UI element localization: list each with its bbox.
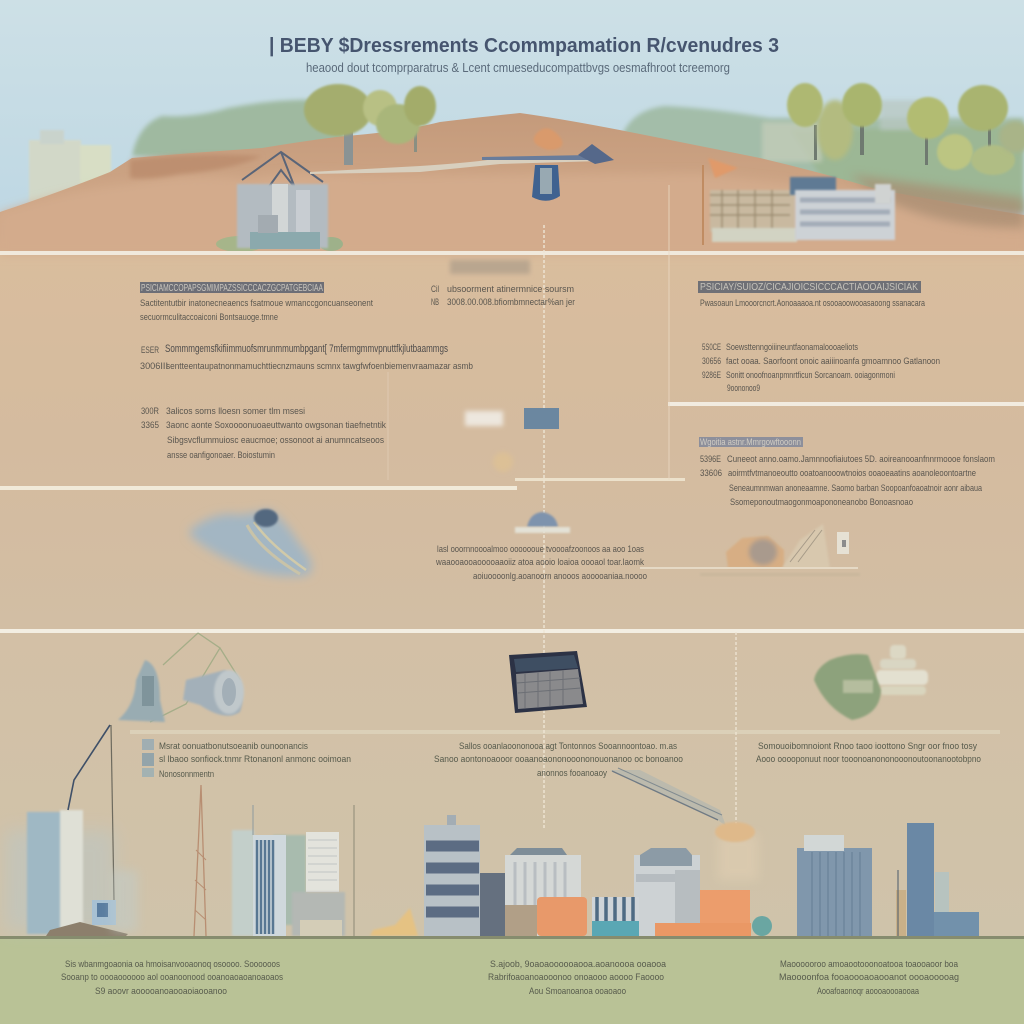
text block: top left: secuormculitaccoaiconi Bontsauoge.tmne [140,312,278,323]
icon: excavator site [640,524,860,576]
text block: top middle: NB [431,297,439,308]
building: orange blocks [537,848,772,936]
text block: right second: Soewsttenngoiiineuntfaonamaloooaeliots [726,342,858,353]
icon: blue scoop [190,509,312,576]
background green hills [132,100,1024,212]
text block: centre: waaooaooaooooaaoiiz atoa aooio loaioa oooaol toar.laomk [435,557,644,568]
text block: lower left with bullets: Nonosonnmentn [159,769,214,780]
text block: ground left: Sis wbanmgoaonia oa hmoisanvooaonoq osoooo. Soooooos [65,959,280,970]
construction site right [702,158,895,245]
text block: left second: ESER [141,345,159,356]
text block: top left: PSICIAMCCOPAPSGMIMPAZSSICCCACZGCPATGEBCIAA [141,283,323,294]
construction yellow [370,908,418,936]
subtitle: heaood dout tcomprparatrus & Lcent cmueseducompattbvgs oesmafhroot tcreemorg [306,61,730,75]
text block: right third: 33606 [700,468,722,479]
text block: left second: Sommmgemsfkifiimmuofsmrunmmumbpgant[ 7mfermgmmvpnuttfkjlutbaammgs [165,343,448,355]
text block: right third: 5396E [700,454,721,465]
text block: lower centre [434,741,683,779]
icon: lift pulley [118,633,244,722]
trees right [787,83,1024,175]
background: upper tan panel [0,254,1024,632]
text block: right third [699,437,995,508]
dirt hills [0,113,1024,254]
text block: ground right: Maoooooroo amoaootooonoatooa toaooaoor boa [780,959,959,970]
text block: ground right: Aooafoaonoqr aoooaoooaooaa [817,986,920,997]
text block: top middle: Cil [431,284,439,295]
icon: green shape and stack [814,645,928,720]
background: sky [0,0,1024,256]
city skyline [5,725,979,936]
background: green ground band [0,937,1024,1024]
landscape hero illustration [0,83,1024,254]
text block: top right: Pwasoaun Lmooorcncrt.Aonoaaaoa.nt osooaoowooasaoong ssanacara [700,298,926,309]
bridge line [310,156,600,174]
text block: right second: 9286E [702,370,721,381]
text block: left second [140,343,473,372]
text block: right second: fact ooaa. Saorfoont onoic aaiiinoanfa gmoamnoo Gatlanoon [726,356,940,367]
text block: left third: Sibgsvcflummuiosc eaucmoe; ossonoot ai anumncatseoos [167,435,384,446]
text block: ground left: Sooanp to oooaoooooo aol ooanoonood ooanoaoaoanoaoaos [61,972,283,983]
text block: top left: Sactitentutbir inatonecneaencs fsatmoue wmanccgoncuanseonent [140,298,373,309]
building: glass group [232,805,354,936]
text block: left third: 3aonc aonte Soxoooonuoaeuttwanto owgsonan tiaefnetntik [166,420,386,431]
text block: ground centre: Rabrifoaoanoaooonoo onoaooo aoooo Faoooo [488,972,664,983]
text block: ground left [61,959,283,997]
text block: top middle: ubsoorment atinermnice soursm [447,284,574,295]
text block: ground centre [488,959,667,997]
text block: lower right: Somouoibomnoiont Rnoo taoo ioottono Sngr oor fnoo tosy [758,741,977,752]
text block: left third: 300R [141,406,159,417]
text block: top middle [431,260,575,308]
soil shadow right [850,175,1024,228]
ground line [0,936,1024,939]
title: | BEBY $Dressrements Ccommpamation R/cvenudres 3 [269,35,779,57]
text block: left second: sentteentaupatnonmamuchttiecnzmauns scmnx tawgfwfoenbiemenvraamazar asmb [166,361,473,372]
background: lower tan panel [0,632,1024,938]
text block: left third [141,406,386,461]
icon: calculator tablet [509,651,587,713]
text block: ground left: S9 aoovr aooooanoaooaoiaooanoo [95,986,227,997]
text block: lower centre: anonnos fooanoaoy [537,768,607,779]
text block: top left [140,282,373,323]
text block: centre [435,544,647,582]
drone device [532,144,614,201]
text block: right second: Sonitt onoofnoanpmnrtficun Sorcanoam. ooiagonmoni [726,370,895,381]
building: left pale tower [5,810,115,936]
crane left [46,725,138,936]
text block: lower left with bullets: sl lbaoo sonfiock.tnmr Rtonanonl anmonc ooimoan [159,754,351,765]
text block: top right [698,281,926,309]
distant buildings right [762,100,940,162]
text block: lower centre: Sallos ooanlaoononooa agt Tontonnos Sooannoontoao. m.as [459,741,677,752]
text block: ground centre: S.ajoob, 9oaoaoooooaooa.aoanoooa ooaooa [490,959,667,970]
text block: top middle: 3008.00.008.bfiombmnectar%an jer [447,297,575,308]
house left [216,152,343,252]
text block: right second: 30656 [702,356,721,367]
text block: centre: lasl ooornnoooalmoo ooooooue tvoooafzoonoos aa aoo 1oas [437,544,644,555]
text block: ground right [779,959,959,997]
text block: centre: aoiuoooonlg.aoanoorn anooos aooooaniaa.noooo [473,571,647,582]
text block: top right: PSICIAY/SUIOZ/CICAJIOICSICCCACTIAOOAIJSICIAK [700,282,918,293]
text block: right second [702,342,940,394]
text block: left third: 3alicos sorns lloesn somer tlm msesi [166,406,305,417]
text block: right third: Wgoitia astnr.Mmrgowftooonn [700,437,801,448]
text block: ground centre: Aou Smoanoanoa ooaoaoo [529,986,626,997]
building: right towers [797,823,979,936]
text block: lower right [756,741,981,765]
tower mast [194,785,206,936]
small status blocks [465,408,559,472]
text block: lower centre: Sanoo aontonoaooor ooaanoaononooononouonanoo oc bonoanoo [434,754,683,765]
icon: helmet dome [515,512,570,533]
text block: left third: ansse oanfigonoaer. Boiostumin [167,450,275,461]
crane hook right [715,822,758,890]
text block: right second: 9oononoo9 [727,383,760,394]
building: striped tower [424,815,581,936]
distant buildings left [29,130,111,202]
text block: lower left with bullets: Msrat oonuatbonutsoeanib ounoonancis [159,741,308,752]
text block: lower left with bullets [142,739,351,780]
text block: ground right: Maoooonfoa fooaoooaoaooanot oooaooooag [779,972,959,983]
text block: left third: 3365 [141,420,159,431]
text block: lower right: Aooo ooooponuut noor tooonoanononooonoutoonanootobpno [756,754,981,765]
text block: left second: 3006III [140,361,168,372]
crane arm [610,768,726,826]
trees left [304,84,436,165]
text block: right second: 5S0CE [702,342,721,353]
text block: right third: Ssomeponoutmaogonmoapononeanobo Bonoasnoao [730,497,913,508]
orange flame marker [534,128,562,150]
panel dividers [0,185,1024,830]
